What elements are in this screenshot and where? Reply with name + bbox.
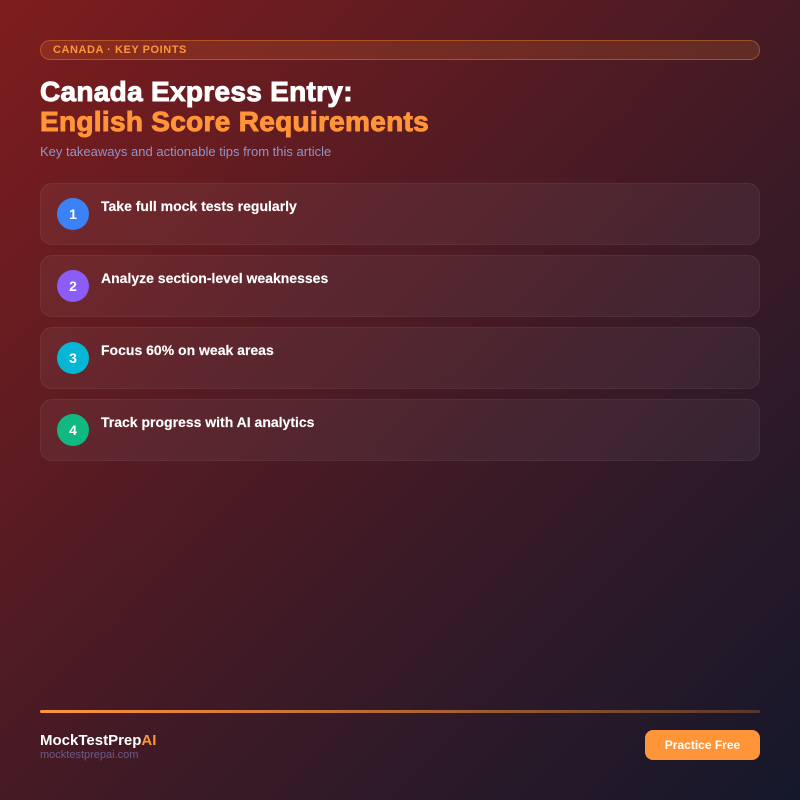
card 1 text: Take full mock tests regularly — [101, 198, 297, 214]
number badge 3 — [57, 342, 89, 374]
card 2 text: Analyze section-level weaknesses — [101, 270, 328, 286]
number badge 4 — [57, 414, 89, 446]
call to action button: Practice Free — [665, 738, 740, 752]
card 3: weak areas — [40, 327, 760, 389]
number badge 3: 3 — [69, 350, 77, 366]
call to action button — [645, 730, 760, 760]
number badge 2: 2 — [69, 278, 77, 294]
title: English Score Requirements — [40, 106, 429, 137]
card 1: mock tests — [40, 183, 760, 245]
card 2: weaknesses — [40, 255, 760, 317]
card 3 text: Focus 60% on weak areas — [101, 342, 274, 358]
card 4 text: Track progress with AI analytics — [101, 414, 314, 430]
brand URL: mocktestprepai.com — [40, 749, 138, 761]
tag pill: Canada key points — [40, 40, 760, 60]
tag pill: Canada key points: CANADA · KEY POINTS — [53, 44, 187, 56]
title: Canada Express Entry: — [40, 76, 353, 107]
number badge 1: 1 — [69, 206, 77, 222]
card 4: AI analytics — [40, 399, 760, 461]
brand name: MockTestPrepAI — [40, 732, 156, 749]
number badge 4: 4 — [69, 422, 77, 438]
number badge 2 — [57, 270, 89, 302]
title — [40, 76, 429, 138]
number badge 1 — [57, 198, 89, 230]
subtitle: Key takeaways and actionable tips from this article — [40, 144, 331, 159]
